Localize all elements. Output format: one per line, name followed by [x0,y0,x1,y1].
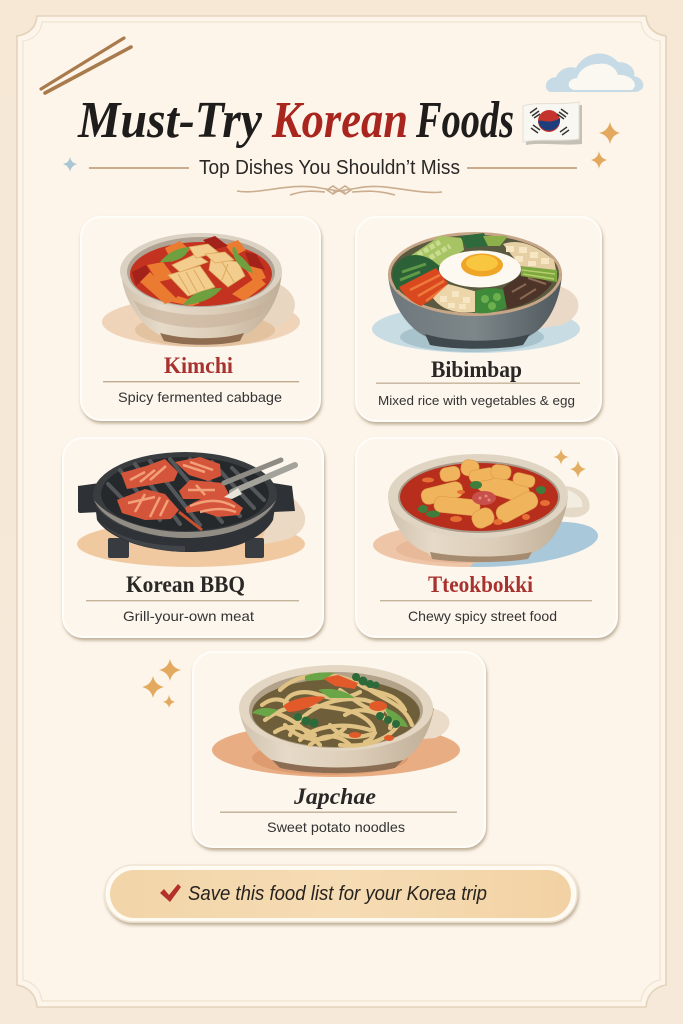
icon: sparkle orange small [591,151,607,169]
description: Kimchi: Spicy fermented cabbage [118,389,282,405]
description: Tteokbokki: Chewy spicy street food [408,608,557,624]
heading: Bibimbap: Bibimbap [431,357,522,382]
heading: Tteokbokki: Tteokbokki [428,572,534,597]
call to action text: Save this food list for your Korea trip [188,883,487,905]
panel: Bibimbap [356,217,601,421]
description: Bibimbap: Mixed rice with vegetables & egg [378,393,575,408]
description: Korean BBQ: Grill-your-own meat [123,608,254,624]
panel: Tteokbokki [356,438,617,637]
icon: sparkle blue [63,157,77,172]
title [77,92,514,149]
icon: kimchi bowl [102,233,300,347]
icon: sparkles [553,449,586,478]
title: Korean [271,92,408,149]
icon: BBQ grill [77,452,305,567]
heading: Korean BBQ: Korean BBQ [126,572,245,597]
icon: sparkles beside Japchae [142,659,181,708]
icon: japchae bowl [212,665,460,777]
heading: Japchae: Japchae [293,784,376,809]
icon: Korean flag [523,102,582,145]
icon: cloud [546,53,643,92]
description: Japchae: Sweet potato noodles [267,819,405,835]
title: Foods [415,92,514,149]
icon: tteokbokki bowl [373,454,598,567]
icon: bibimbap stone bowl [372,232,580,353]
subtitle: Top Dishes You Shouldn’t Miss [199,157,460,179]
icon: sparkle orange large [599,122,620,144]
panel: Korean BBQ [63,438,323,637]
heading: Kimchi: Kimchi [164,353,234,378]
title: Must-Try [77,92,263,149]
call to action pill [105,865,577,922]
panel: Kimchi [81,217,320,420]
panel: Japchae [193,652,485,847]
icon: check mark [160,884,181,902]
tongs [224,460,295,499]
icon: chopsticks [41,38,131,93]
ornament flourish [237,186,442,195]
meat [117,457,243,530]
